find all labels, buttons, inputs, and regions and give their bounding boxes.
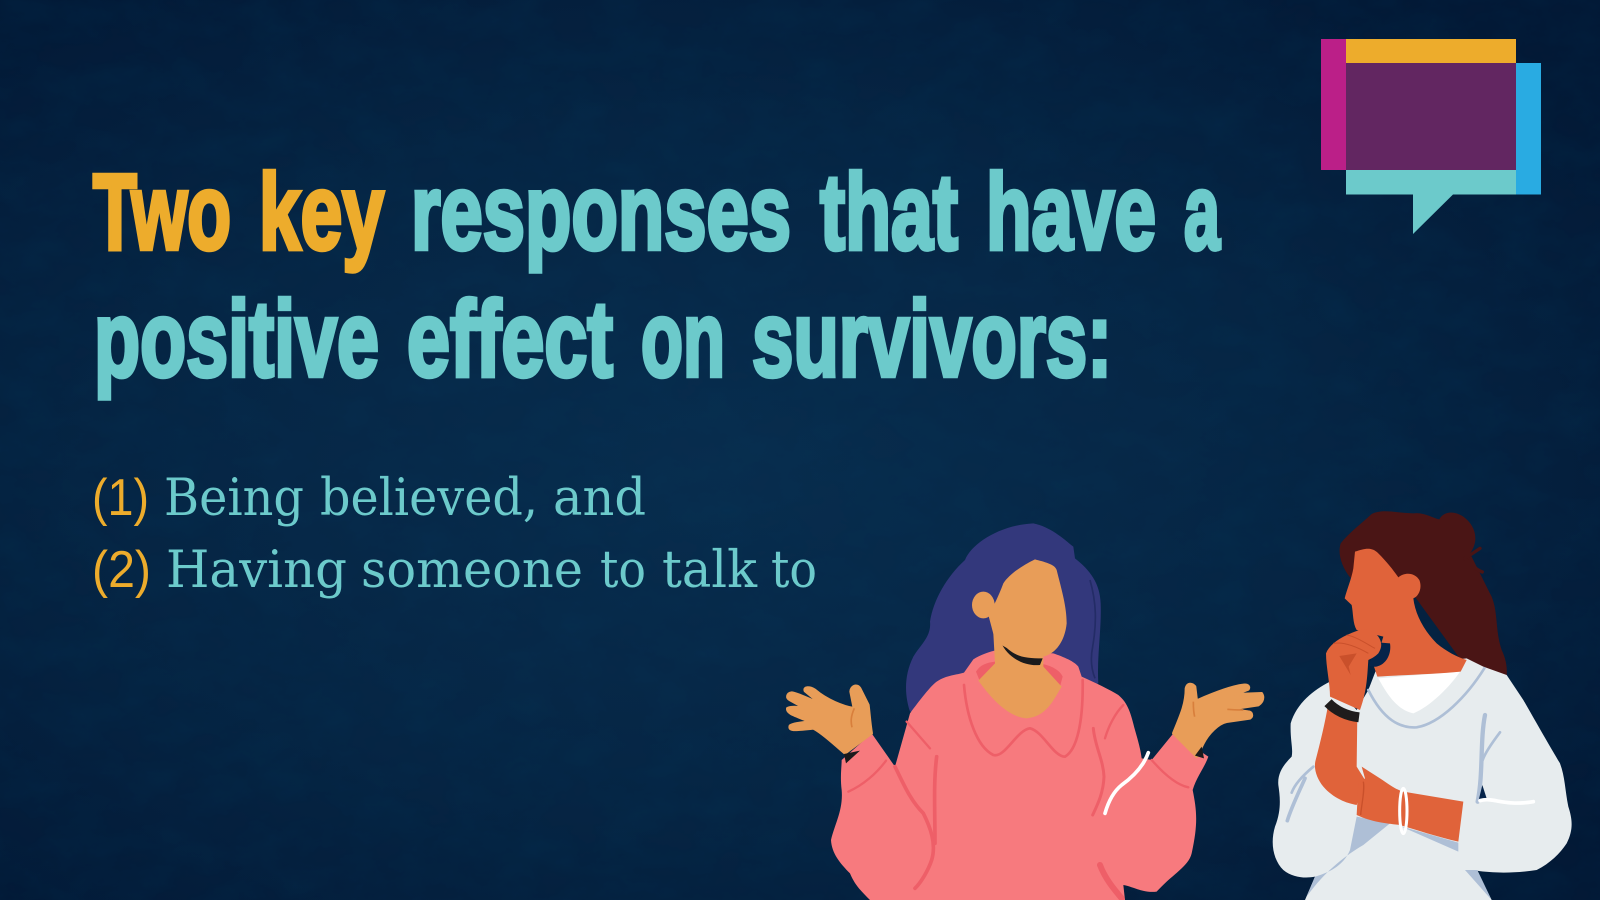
logo: speech bubble [1321,39,1541,234]
list item 2 [92,541,817,600]
list item 2: someone [361,541,583,600]
title: key [259,151,384,272]
title: that [820,151,958,272]
title: a [1184,151,1221,272]
list item 2: to [771,541,817,600]
title: on [641,278,725,399]
title: survivors: [752,278,1112,399]
list item 2: to [600,541,646,600]
list item 1: and [553,469,646,528]
title: responses [411,151,791,272]
illustration: woman in white sweater [1273,511,1572,900]
list item 2: talk [662,541,758,600]
title [93,151,1221,399]
title: Two [93,151,231,272]
list item 2: (2) [92,541,151,599]
illustration: woman in pink sweater [787,523,1263,900]
list item 1: Being [164,469,304,528]
list item 2: Having [166,541,347,600]
title: positive [94,278,379,399]
list item 1 [92,469,646,528]
list item 1: (1) [92,469,149,527]
list item 1: believed, [320,469,538,528]
title: effect [407,278,613,399]
title: have [986,151,1156,272]
